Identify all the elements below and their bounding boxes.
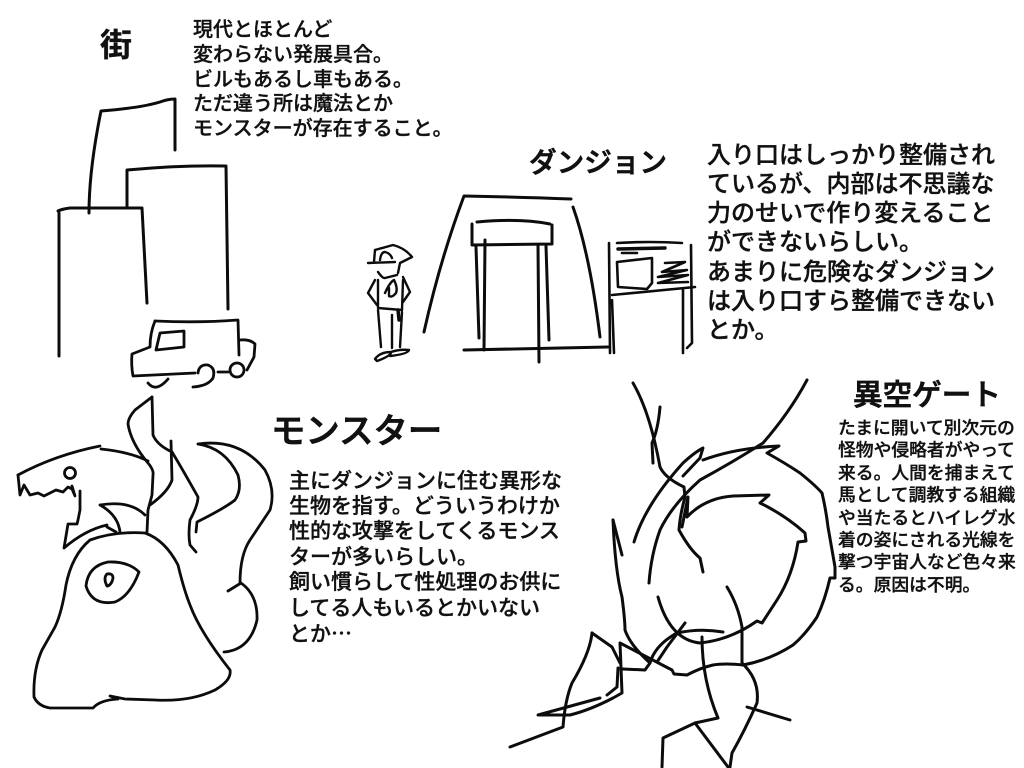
illustration: otherworld gate: [510, 380, 835, 767]
text block: dungeon description: 入り口はしっかり整備され: [707, 142, 995, 168]
text block: monster description: 性的な攻撃をしてくるモンス: [289, 520, 560, 543]
text block: dungeon description: は入り口すら整備できない: [707, 288, 995, 315]
text block: gate description: [838, 418, 1016, 595]
text block: city description: 現代とほとんど: [193, 19, 332, 41]
text block: dungeon description: ているが、内部は不思議な: [707, 171, 995, 198]
illustration: guard: [368, 245, 412, 361]
illustration: monster: [18, 397, 272, 708]
heading: モンスター: モンスター: [271, 413, 442, 451]
text block: city description: ただ違う所は魔法とか: [193, 93, 393, 115]
text block: monster description: 飼い慣らして性処理のお供に: [289, 571, 561, 594]
text block: gate description: 怪物や侵略者がやって: [838, 440, 1015, 460]
text block: gate description: 来る。人間を捕まえて: [838, 463, 1015, 483]
text block: city description: ビルもあるし車もある。: [193, 69, 413, 91]
heading: 街: 街: [100, 27, 132, 63]
text block: dungeon description: ができないらしい。: [707, 229, 923, 256]
illustration: car: [132, 320, 255, 387]
heading: ダンジョン: ダンジョン: [529, 147, 667, 178]
illustration: dungeon gate: [424, 196, 608, 362]
heading: 異空ゲート: 異空ゲート: [853, 379, 1001, 412]
text block: gate description: 馬として調教する組織: [838, 485, 1015, 505]
text block: monster description: 主にダンジョンに住む異形な: [289, 470, 562, 492]
text block: monster description: 生物を指す。どういうわけか: [289, 495, 560, 518]
text block: dungeon description: 力のせいで作り変えること: [707, 200, 994, 227]
text block: city description: [193, 19, 453, 140]
text block: dungeon description: [707, 142, 995, 344]
text block: dungeon description: とか。: [707, 317, 779, 344]
text block: gate description: 撃つ宇宙人など色々来: [838, 552, 1016, 572]
text block: monster description: とか…: [289, 618, 352, 648]
text block: monster description: してる人もいるとかいない: [289, 597, 540, 620]
text block: city description: 変わらない発展具合。: [193, 44, 393, 66]
text block: gate description: や当たるとハイレグ水: [838, 508, 1015, 528]
text block: gate description: る。原因は不明。: [838, 575, 980, 595]
text block: monster description: [289, 470, 562, 648]
illustration: notice board: [609, 242, 695, 353]
text block: city description: モンスターが存在すること。: [193, 118, 453, 140]
text block: gate description: 着の姿にされる光線を: [838, 530, 1015, 550]
text block: dungeon description: あまりに危険なダンジョン: [707, 259, 995, 286]
illustration: city buildings: [58, 99, 228, 356]
text block: gate description: たまに開いて別次元の: [838, 418, 1015, 438]
text block: monster description: ターが多いらしい。: [289, 546, 478, 569]
